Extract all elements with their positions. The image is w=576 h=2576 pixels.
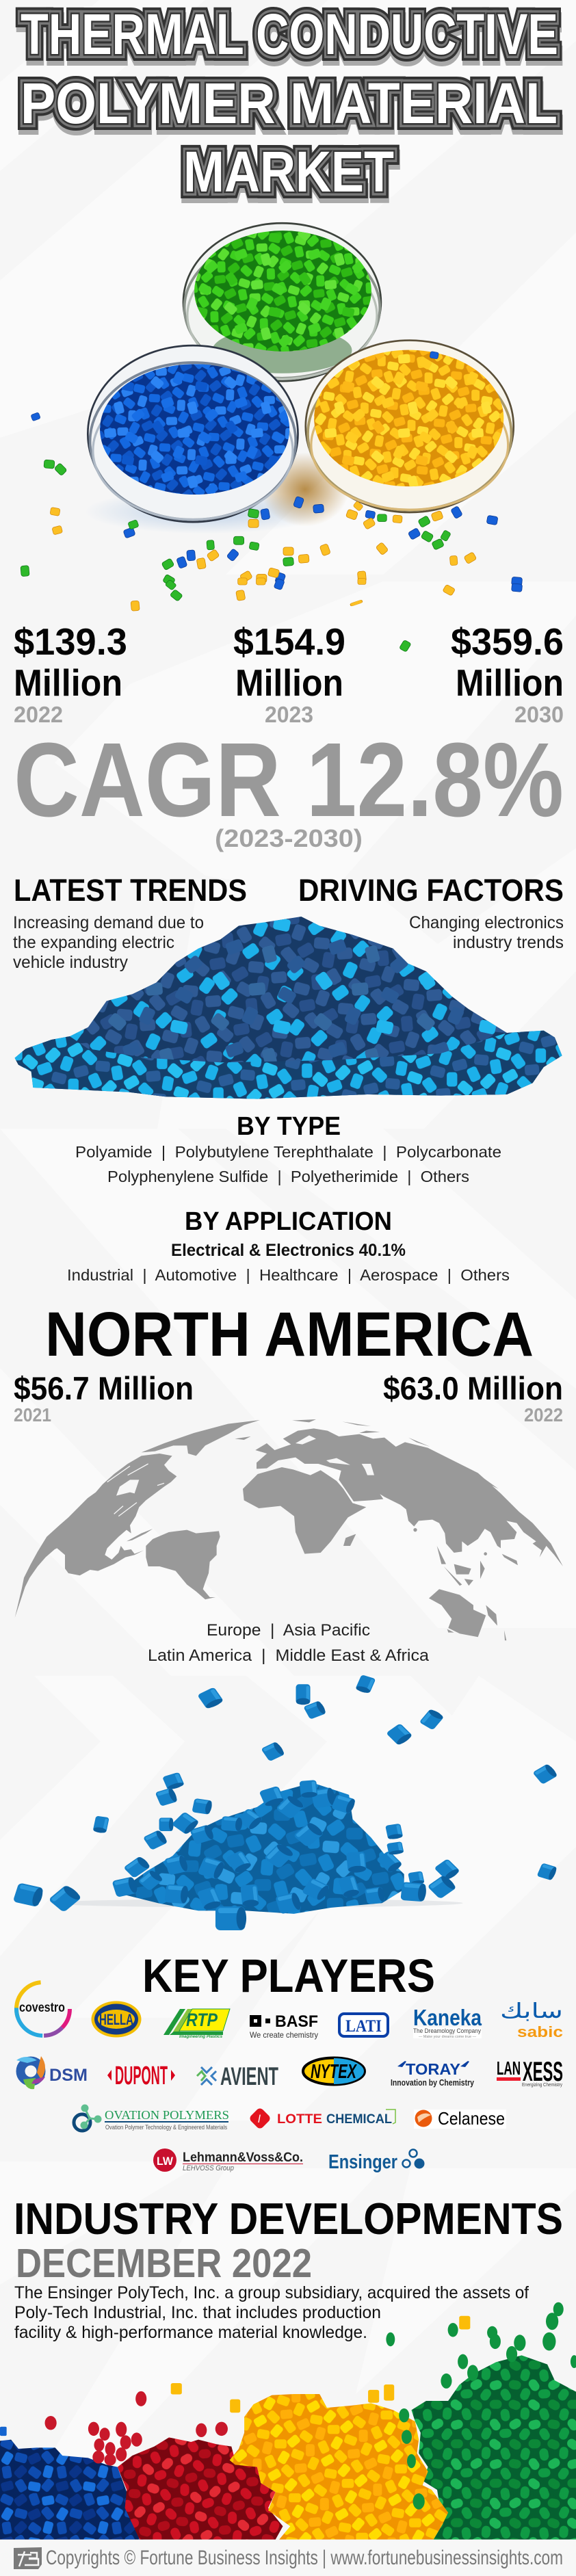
logo: Toray: Innovation by Chemistry bbox=[391, 2077, 475, 2088]
logo: BASF bbox=[250, 2012, 318, 2040]
latest trends heading: LATEST TRENDS bbox=[14, 873, 247, 908]
title line 3: MARKET bbox=[183, 140, 394, 204]
logo: Toray bbox=[391, 2060, 475, 2088]
logo: Kaneka: Kaneka bbox=[413, 2005, 482, 2030]
north america 2022 value bbox=[383, 1370, 563, 1425]
americas bbox=[15, 1420, 276, 1618]
statistic: 2022 value bbox=[14, 620, 127, 727]
logo: Ensinger: Ensinger bbox=[328, 2151, 397, 2173]
development description: The Ensinger PolyTech, Inc. a group subsidiary, acquired the assets of bbox=[14, 2283, 529, 2302]
logo: Lotte Chemical: l bbox=[258, 2114, 261, 2125]
north america 2021 value: 2021 bbox=[14, 1404, 51, 1425]
logo: Lehmann&Voss&Co.: LW bbox=[157, 2155, 174, 2168]
logo: Ovation Polymers: OVATION POLYMERS bbox=[105, 2108, 229, 2122]
logo: DSM bbox=[16, 2056, 88, 2089]
logo: SABIC: sabic bbox=[517, 2023, 563, 2040]
logo: Nytex: NYTEX bbox=[311, 2061, 357, 2083]
development date: DECEMBER 2022 bbox=[16, 2241, 312, 2286]
key players heading: KEY PLAYERS bbox=[142, 1949, 435, 2002]
statistic: 2022 value: Million bbox=[14, 661, 122, 704]
other regions list: Latin America | Middle East & Africa bbox=[148, 1646, 430, 1665]
statistic: 2023 value: Million bbox=[235, 661, 343, 704]
statistic: 2022 value: $139.3 bbox=[14, 620, 127, 663]
latest trends text: Increasing demand due to bbox=[13, 913, 204, 932]
leading application share: Electrical & Electronics 40.1% bbox=[171, 1241, 406, 1260]
statistic: 2022 value: 2022 bbox=[14, 702, 63, 727]
development description: Poly-Tech Industrial, Inc. that includes production bbox=[14, 2303, 381, 2322]
logo: Avient bbox=[197, 2062, 278, 2090]
application list: Industrial | Automotive | Healthcare | Aerospace | Others bbox=[67, 1266, 510, 1284]
title line 3: MARKET bbox=[183, 140, 394, 204]
title line 3: MARKET bbox=[183, 140, 394, 204]
logo: HELLA: HELLA bbox=[99, 2011, 133, 2028]
logo: Kaneka: The Dreamology Company bbox=[413, 2027, 481, 2034]
yellow bowl bbox=[306, 341, 514, 512]
logo: SABIC: سابك bbox=[500, 1999, 563, 2023]
title line 3: MARKET bbox=[183, 140, 394, 204]
logo: Avient: AVIENT bbox=[220, 2062, 278, 2090]
other regions list bbox=[148, 1621, 430, 1665]
falling pellets above statistics bbox=[131, 578, 523, 652]
footer logo icon bbox=[14, 2547, 42, 2569]
logo: Celanese bbox=[414, 2108, 506, 2129]
north america 2022 value: 2022 bbox=[524, 1404, 563, 1425]
statistic: 2030 value: $359.6 bbox=[451, 620, 564, 663]
europe, africa, asia and oceania bbox=[243, 1419, 563, 1640]
green pile bbox=[411, 2355, 576, 2540]
scattered blue pellets bbox=[31, 351, 523, 586]
stray green pellets bbox=[386, 2302, 576, 2510]
logo: Lanxess: Energizing Chemistry bbox=[522, 2081, 562, 2088]
logo: covestro: covestro bbox=[19, 2001, 65, 2015]
scattered yellow pellets bbox=[50, 501, 477, 583]
logo: BASF: BASF bbox=[275, 2012, 318, 2031]
logo: LATI bbox=[339, 2014, 388, 2036]
logo: RTP bbox=[163, 2009, 230, 2039]
driving factors text: industry trends bbox=[453, 933, 564, 952]
stray blue pellet bbox=[0, 2427, 7, 2436]
blue bowl bbox=[88, 345, 298, 522]
development description: facility & high-performance material knowledge. bbox=[14, 2323, 367, 2342]
logo: DSM: DSM bbox=[49, 2066, 88, 2085]
falling pellets bbox=[13, 1674, 558, 1913]
logo: Lanxess bbox=[497, 2057, 563, 2088]
north america 2022 value: $63.0 Million bbox=[383, 1370, 563, 1406]
statistic: 2030 value bbox=[451, 620, 564, 727]
scattered green pellets bbox=[21, 460, 451, 586]
by type heading: BY TYPE bbox=[237, 1112, 341, 1141]
logo: DuPont bbox=[107, 2062, 175, 2090]
driving factors heading: DRIVING FACTORS bbox=[298, 873, 564, 908]
stray pellets above piles bbox=[0, 2302, 576, 2510]
by application heading: BY APPLICATION bbox=[185, 1207, 392, 1236]
logo: Lotte Chemical: LOTTE bbox=[277, 2112, 322, 2127]
logo: SABIC bbox=[500, 1999, 563, 2040]
CAGR period: (2023-2030) bbox=[215, 824, 363, 852]
yellow pile bbox=[230, 2394, 448, 2540]
driving factors text bbox=[409, 913, 564, 952]
logo: HELLA bbox=[92, 2001, 141, 2037]
logo: LATI: LATI bbox=[345, 2017, 382, 2036]
blue pile bbox=[0, 2440, 143, 2540]
logo: DuPont: DUPONT bbox=[115, 2062, 168, 2090]
logo: BASF: We create chemistry bbox=[250, 2030, 318, 2040]
north america 2021 value bbox=[14, 1370, 194, 1425]
logo: Ovation Polymers: Ovation Polymer Technology & Engineered Materials bbox=[105, 2124, 227, 2131]
hero image: bowls of pellets bbox=[21, 223, 523, 586]
statistic: 2023 value: 2023 bbox=[265, 702, 313, 727]
north america 2021 value: $56.7 Million bbox=[14, 1370, 194, 1406]
latest trends text: vehicle industry bbox=[13, 953, 128, 972]
logo: Toray: TORAY bbox=[406, 2060, 460, 2078]
driving factors text: Changing electronics bbox=[409, 913, 564, 932]
logo: covestro bbox=[16, 1982, 70, 2036]
latest trends text bbox=[13, 913, 204, 972]
logo: Lotte Chemical bbox=[248, 2107, 395, 2130]
by type list: Polyamide | Polybutylene Terephthalate | Polycarbonate bbox=[75, 1143, 501, 1161]
footer bbox=[0, 2540, 576, 2576]
other regions list: Europe | Asia Pacific bbox=[207, 1621, 370, 1640]
heap bbox=[51, 1780, 463, 1930]
by type list bbox=[75, 1143, 501, 1185]
stray yellow pellets bbox=[171, 2316, 470, 2413]
statistic: 2030 value: Million bbox=[456, 661, 564, 704]
logo: Kaneka bbox=[413, 2005, 482, 2039]
world map bbox=[15, 1419, 563, 1640]
title bbox=[21, 2, 559, 209]
stray red pellets bbox=[45, 2391, 228, 2466]
logo: Lehmann&Voss&Co.: LEHVOSS Group bbox=[183, 2164, 234, 2172]
title line 3: MARKET bbox=[184, 144, 395, 209]
north america heading: NORTH AMERICA bbox=[45, 1300, 534, 1369]
statistic: 2030 value: 2030 bbox=[514, 702, 564, 727]
image: blue pellets heap with falling pellets bbox=[13, 1674, 558, 1930]
logo: Ovation Polymers bbox=[74, 2104, 229, 2131]
by type list: Polyphenylene Sulfide | Polyetherimide | Others bbox=[107, 1168, 469, 1185]
logo: RTP: RTP bbox=[186, 2010, 218, 2030]
green bowl bbox=[183, 223, 381, 381]
image: teal pellet heap bbox=[14, 917, 562, 1099]
logo: RTP: Imagineering Plastics bbox=[179, 2035, 223, 2039]
latest trends text: the expanding electric bbox=[13, 933, 174, 952]
statistic: 2023 value bbox=[233, 620, 345, 727]
image: coloured pellet piles bbox=[0, 2355, 576, 2540]
logo: Lanxess: LAN bbox=[497, 2058, 521, 2079]
red pile bbox=[118, 2437, 283, 2540]
logo: Lehmann&Voss&Co.: Lehmann&Voss&Co. bbox=[183, 2151, 303, 2165]
logo: Lehmann&Voss&Co. bbox=[153, 2148, 303, 2172]
logo: Kaneka: — Make your dreams come true — bbox=[419, 2035, 476, 2039]
development description bbox=[14, 2283, 529, 2342]
statistic: 2023 value: $154.9 bbox=[233, 620, 345, 663]
logo: Lotte Chemical: CHEMICAL bbox=[326, 2112, 392, 2127]
logo: Celanese: Celanese bbox=[438, 2108, 505, 2129]
logo: Nytex bbox=[303, 2058, 365, 2085]
key player logos bbox=[16, 1982, 563, 2173]
